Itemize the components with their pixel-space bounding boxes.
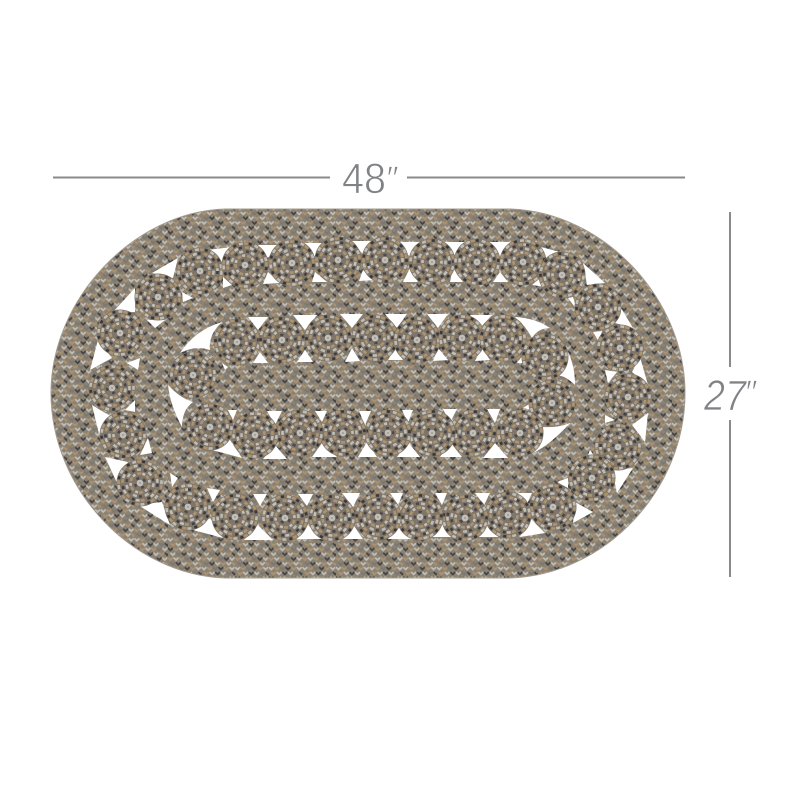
height inch mark: ″ [744, 374, 757, 412]
inner upper row gaps [180, 322, 222, 353]
width inch mark: ″ [385, 160, 398, 198]
middle braid ring [153, 300, 592, 475]
width label: 48 [342, 155, 386, 203]
height label: 27 [703, 372, 748, 420]
central braid [217, 362, 527, 409]
left end gaps [152, 258, 178, 278]
rug [51, 209, 685, 578]
outer coil ring [79, 228, 661, 550]
gaps showing background between coils [90, 241, 648, 540]
bottom row gaps [207, 488, 220, 502]
height line bottom [729, 420, 731, 577]
inner coil ring [168, 305, 581, 466]
height dimension: 27 inches [703, 212, 757, 577]
top row gaps [207, 247, 232, 263]
rug body: outer braid [51, 209, 685, 578]
width line right [407, 176, 685, 178]
right end gaps [583, 263, 605, 285]
width line left [53, 176, 330, 178]
height line top [729, 212, 731, 367]
inner lower row gaps [228, 410, 237, 420]
width dimension: 48 inches [53, 155, 685, 203]
